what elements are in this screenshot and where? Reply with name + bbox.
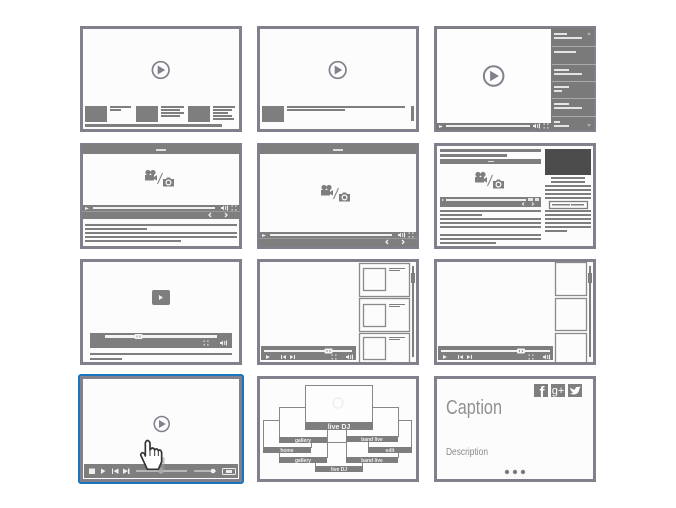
sidebar text and button bbox=[545, 177, 591, 232]
carousel screen: lower left gallery: gallery bbox=[295, 458, 311, 464]
player controls bbox=[440, 197, 541, 207]
carousel screen: lower left gallery bbox=[279, 426, 328, 464]
thumbnail row bbox=[85, 106, 235, 127]
icon: facebook bbox=[534, 384, 548, 401]
icon: video and photo bbox=[145, 170, 174, 186]
carousel screen: main live DJ bbox=[305, 386, 373, 431]
carousel screen: home bbox=[263, 420, 312, 454]
icon: play button bbox=[152, 62, 169, 78]
pagination dots bbox=[505, 470, 525, 474]
description text: Description bbox=[446, 447, 488, 458]
control bar bbox=[261, 346, 356, 360]
scrollbar bbox=[411, 266, 415, 357]
panel: player with header bar and text below bbox=[82, 144, 240, 248]
playlist sidebar bbox=[552, 32, 596, 127]
panel: article page with embedded player bbox=[436, 144, 594, 248]
thumbnail and description bbox=[262, 106, 414, 122]
icon: facebook: f bbox=[540, 384, 546, 401]
text lines bbox=[85, 224, 237, 242]
carousel screen: upper right band live bbox=[346, 408, 398, 443]
icon: play button bbox=[329, 62, 346, 78]
carousel screen: main live DJ: live DJ bbox=[328, 424, 350, 431]
panel: player with thumbnails only bbox=[436, 260, 594, 364]
icon: twitter bbox=[568, 384, 582, 397]
carousel screen: upper right band live: band live bbox=[361, 437, 383, 443]
icon: google plus: g+ bbox=[552, 385, 564, 397]
carousel screen: upper left gallery bbox=[279, 408, 328, 444]
panel: caption and social links bbox=[436, 378, 594, 480]
icon: hand cursor bbox=[141, 440, 165, 470]
caption heading: Caption bbox=[446, 397, 502, 419]
carousel screen: lower right band live bbox=[346, 426, 398, 464]
headline lines and header band bbox=[440, 149, 541, 164]
panel: player with thumbnails and descriptions bbox=[258, 260, 418, 364]
player controls bbox=[439, 124, 548, 128]
panel: carousel of stacked screens bbox=[258, 378, 418, 480]
icon: play button bbox=[484, 66, 503, 86]
control bar bbox=[84, 464, 238, 478]
carousel screen: edit bbox=[368, 420, 412, 454]
scrollbar bbox=[588, 266, 592, 357]
icon: video and photo bbox=[475, 172, 504, 188]
panel: player with header and nav bar bbox=[258, 144, 418, 248]
player controls bbox=[259, 232, 417, 247]
carousel screen: lower right band live: band live bbox=[361, 458, 383, 464]
thumbnail list bbox=[556, 262, 586, 362]
control bar bbox=[438, 346, 553, 360]
player controls bbox=[82, 205, 240, 219]
panel: player with floating controls bbox=[82, 260, 240, 364]
carousel screen: bottom live DJ bbox=[315, 442, 363, 473]
carousel screen: upper left gallery: gallery bbox=[295, 438, 311, 444]
carousel screen: edit: edit bbox=[386, 448, 395, 454]
icon: play button bbox=[154, 417, 169, 431]
thumbnail list bbox=[360, 264, 410, 362]
panel: video with single thumbnail bbox=[258, 28, 418, 130]
icon: video and photo bbox=[321, 185, 350, 202]
icon: square play button bbox=[152, 290, 170, 305]
panel: selected player with hand cursor bbox=[79, 375, 243, 483]
article text bbox=[440, 210, 541, 244]
carousel screen: home: home bbox=[280, 448, 294, 454]
sidebar image bbox=[545, 149, 591, 175]
panel: video with dark playlist sidebar bbox=[434, 26, 596, 132]
text lines bbox=[90, 353, 232, 360]
panel: video with three thumbnails bbox=[82, 28, 240, 130]
carousel screen: bottom live DJ: live DJ bbox=[331, 467, 347, 473]
floating control bar bbox=[90, 333, 232, 348]
